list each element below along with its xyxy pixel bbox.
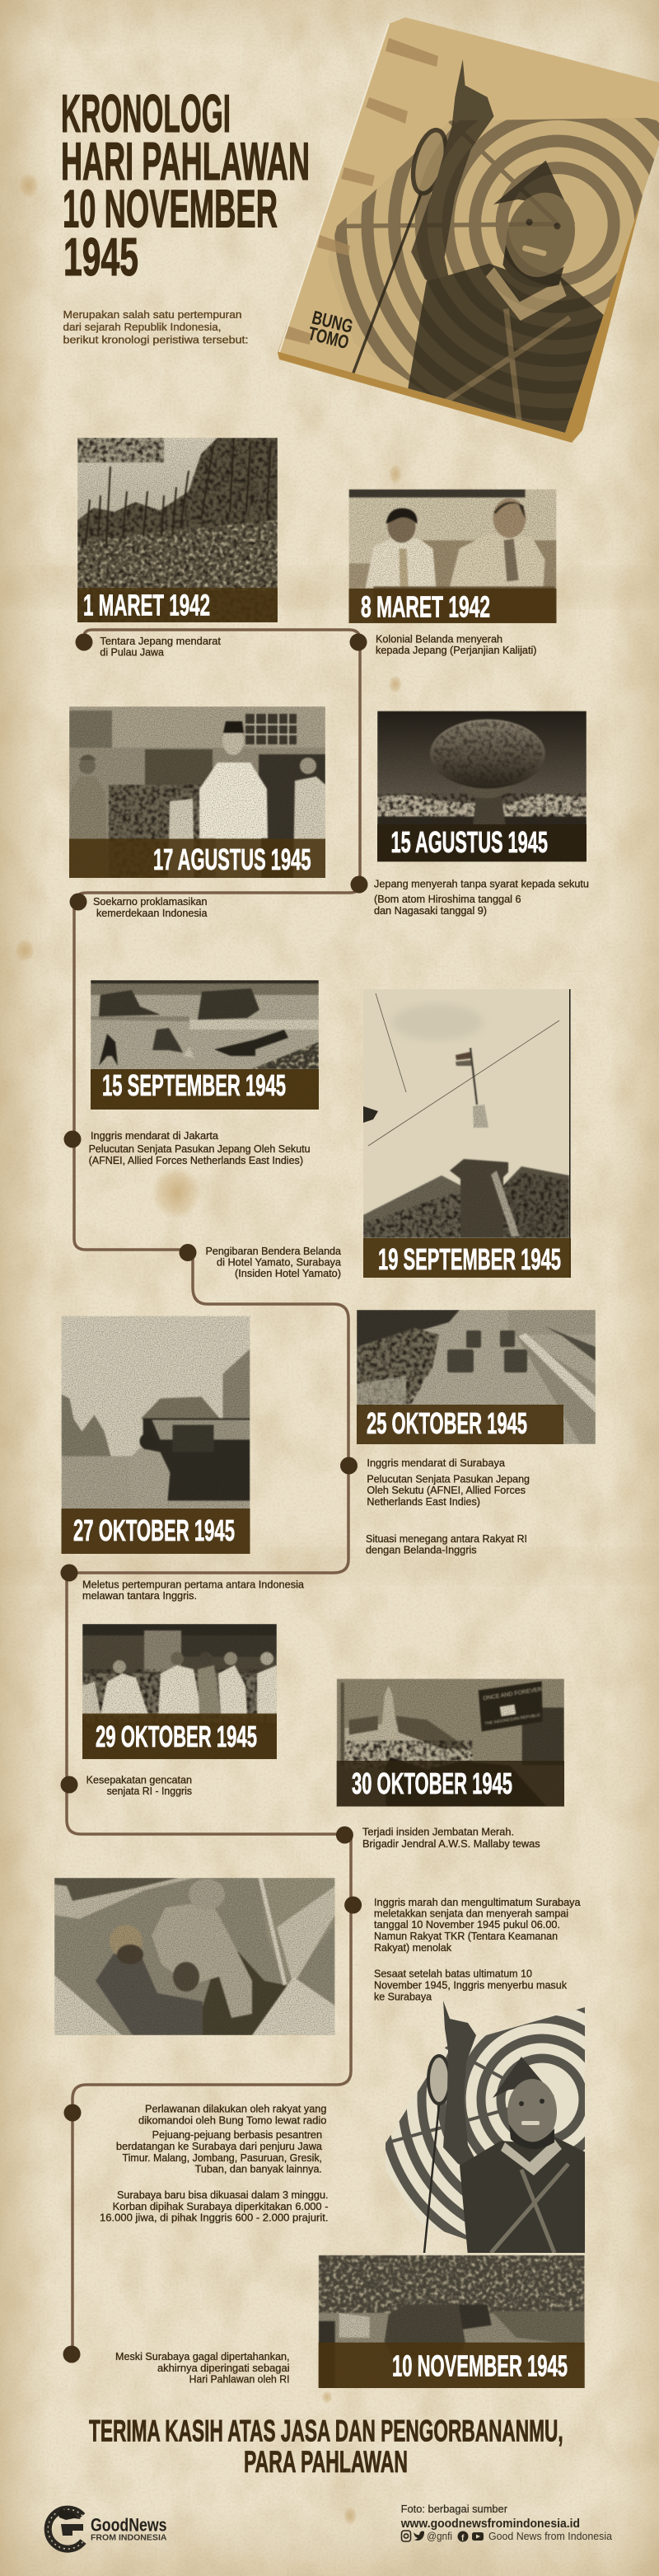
dot: 17 Agustus <box>69 894 87 910</box>
caption: 29 Oktober <box>86 1774 192 1797</box>
date label <box>363 1238 571 1278</box>
photo: soldier beside armored vehicle <box>61 1316 250 1553</box>
dot: 1 Maret <box>76 633 92 651</box>
caption: perlawanan <box>100 2104 328 2224</box>
dot: ultimatum <box>344 1896 362 1914</box>
caption: 25 Oktober: Oleh Sekutu (AFNEI, Allied Forces <box>367 1485 526 1496</box>
caption: 10 November: akhirnya diperingati sebagai <box>157 2363 290 2374</box>
date label: 8 MARET 1942 <box>361 590 490 623</box>
caption: 29 Oktober: senjata RI - Inggris <box>107 1785 192 1797</box>
caption: ultimatum: meletakkan senjata dan menyerah sampai <box>374 1908 568 1920</box>
panel: 19 September 1945 <box>363 989 571 1278</box>
caption: 25 Oktober: Pelucutan Senjata Pasukan Jepang <box>367 1474 530 1485</box>
photo: Bung Tomo speaking <box>386 2001 585 2253</box>
date label: 15 SEPTEMBER 1945 <box>102 1068 286 1102</box>
photo: Soekarno proclamation <box>69 706 325 878</box>
caption: perlawanan: Korban dipihak Surabaya diperkitakan 6.000 - <box>113 2201 328 2212</box>
caption: 19 September: Pengibaran Bendera Belanda <box>206 1246 341 1257</box>
caption: 1 Maret <box>100 636 222 658</box>
dot: 15 Agustus <box>351 875 367 894</box>
caption: perlawanan: Surabaya baru bisa dikuasai dalam 3 minggu. <box>117 2189 328 2201</box>
dot: 15 September <box>64 1131 81 1147</box>
caption: 19 September: (Insiden Hotel Yamato) <box>235 1268 341 1279</box>
caption: 1 Maret: Tentara Jepang mendarat <box>100 636 222 647</box>
caption: 15 Agustus <box>374 879 589 917</box>
panel: 30 Oktober 1945 <box>337 1678 564 1807</box>
caption: 17 Agustus: kemerdekaan Indonesia <box>96 908 208 919</box>
caption: perlawanan: Pejuang-pejuang berbasis pesantren <box>152 2129 322 2141</box>
caption: 17 Agustus <box>93 896 208 919</box>
caption: perlawanan: Timur. Malang, Jombang, Pasuruan, Gresik, <box>122 2152 322 2164</box>
icon: facebook: f <box>461 2534 465 2543</box>
book cover label: BUNG <box>310 307 355 337</box>
icon: facebook <box>458 2531 468 2543</box>
caption: 15 September: (AFNEI, Allied Forces Netherlands East Indies) <box>89 1155 303 1166</box>
dot: 10 November <box>63 2346 81 2363</box>
date label <box>377 824 587 861</box>
panel: 15 September 1945 <box>91 980 319 1110</box>
panel: 15 Agustus 1945 <box>377 711 587 862</box>
credits: Foto: berbagai sumber <box>401 2503 507 2515</box>
logo: GoodNews from Indonesia: GoodNews <box>91 2515 166 2536</box>
date label: 15 AGUSTUS 1945 <box>390 825 548 859</box>
logo: GoodNews from Indonesia: FROM INDONESIA <box>91 2533 167 2543</box>
caption: perlawanan: Tuban, dan banyak lainnya. <box>195 2164 322 2175</box>
credits: Good News from Indonesia <box>488 2530 613 2542</box>
caption: 17 Agustus: Soekarno proklamasikan <box>93 896 208 908</box>
book cover label: TOMO <box>306 322 351 353</box>
caption: 15 September: Inggris mendarat di Jakarta <box>91 1130 218 1142</box>
caption: perlawanan: dikomandoi oleh Bung Tomo lewat radio <box>138 2115 326 2127</box>
caption: ultimatum: tanggal 10 November 1945 pukul 06.00. <box>374 1919 560 1931</box>
photo: tanks under trees <box>318 2255 585 2388</box>
dot: 8 Maret <box>349 633 367 651</box>
date label <box>319 2343 585 2388</box>
caption: 10 November <box>115 2351 290 2386</box>
icon: instagram <box>402 2531 410 2541</box>
caption: ultimatum: Sesaat setelah batas ultimatum 10 <box>374 1968 532 1980</box>
closing heading: PARA PAHLAWAN <box>244 2445 408 2479</box>
dot: 27 Oktober <box>61 1565 77 1581</box>
date label: 17 AGUSTUS 1945 <box>153 842 311 876</box>
dot: 29 Oktober <box>61 1776 77 1794</box>
date label <box>61 1509 250 1554</box>
caption: ultimatum: ke Surabaya <box>374 1992 432 2003</box>
dot: perlawanan <box>64 2104 81 2122</box>
intro text: berikut kronologi peristiwa tersebut: <box>63 333 249 346</box>
photo: street with billboard and wrecked car: THE INDONESIAN REPUBLIC <box>484 1713 541 1726</box>
panel: 17 Agustus 1945 <box>69 706 325 878</box>
caption: ultimatum: Rakyat) menolak <box>374 1942 452 1954</box>
photo: flag on Hotel Yamato tower <box>363 989 571 1278</box>
date label <box>91 1068 319 1110</box>
caption: 8 Maret: kepada Jepang (Perjanjian Kalijati) <box>376 645 537 656</box>
caption: 25 Oktober: Situasi menegang antara Rakyat RI <box>366 1533 527 1545</box>
icon: youtube <box>472 2532 484 2541</box>
date label: 25 OKTOBER 1945 <box>367 1406 527 1440</box>
date label: 27 OKTOBER 1945 <box>73 1513 235 1547</box>
date label <box>69 839 325 878</box>
caption: 19 September <box>206 1246 341 1279</box>
title: KRONOLOGI <box>61 83 231 143</box>
caption: 8 Maret: Kolonial Belanda menyerah <box>376 633 502 645</box>
photo: atomic mushroom cloud <box>377 711 587 862</box>
logo: GoodNews from Indonesia <box>48 2508 167 2549</box>
credits: @gnfi <box>427 2530 452 2542</box>
dot: 25 Oktober <box>340 1457 358 1474</box>
caption: 25 Oktober: Inggris mendarat di Surabaya <box>367 1457 505 1469</box>
caption: perlawanan: Perlawanan dilakukan oleh rakyat yang <box>145 2104 326 2115</box>
photo: street with billboard and wrecked car <box>336 1678 564 1807</box>
caption: 30 Oktober <box>362 1827 540 1850</box>
credits: www.goodnewsfromindonesia.id <box>400 2517 580 2531</box>
caption: 15 Agustus: Jepang menyerah tanpa syarat kepada sekutu <box>374 879 589 890</box>
caption: 30 Oktober: Terjadi insiden Jembatan Merah. <box>362 1827 514 1838</box>
date label <box>82 1714 277 1759</box>
caption: 8 Maret <box>376 633 537 656</box>
date label: 30 OKTOBER 1945 <box>352 1767 512 1800</box>
photo: tanks on the boulevard <box>357 1310 596 1444</box>
timeline line <box>67 630 360 2354</box>
date label: 1 MARET 1942 <box>83 589 210 622</box>
caption: 10 November: Hari Pahlawan oleh RI <box>189 2374 290 2386</box>
closing heading <box>89 2414 563 2479</box>
caption: 27 Oktober: melawan tantara Inggris. <box>82 1590 197 1602</box>
title: 1945 <box>63 227 138 287</box>
caption: 25 Oktober: dengan Belanda-Inggris <box>366 1545 477 1556</box>
caption: 27 Oktober <box>82 1579 304 1602</box>
caption: ultimatum: Inggris marah dan mengultimatum Surabaya <box>374 1897 581 1908</box>
icon: garuda emblem <box>48 2508 83 2549</box>
caption: 30 Oktober: Brigadir Jendral A.W.S. Mallaby tewas <box>362 1838 540 1850</box>
panel: 27 Oktober 1945 <box>61 1316 250 1554</box>
panel: 25 Oktober 1945 <box>357 1310 596 1444</box>
panel: 10 November 1945 <box>319 2255 585 2389</box>
caption: 29 Oktober: Kesepakatan gencatan <box>86 1774 192 1785</box>
title: 10 NOVEMBER <box>63 178 278 239</box>
intro text <box>63 308 249 346</box>
credits <box>400 2503 613 2543</box>
caption: ultimatum <box>374 1897 581 2003</box>
caption: perlawanan: berdatangan ke Surabaya dari penjuru Jawa <box>116 2141 322 2152</box>
photo: Japanese soldiers with raised rifles <box>77 438 278 622</box>
caption: 19 September: di Hotel Yamato, Surabaya <box>217 1257 341 1269</box>
caption: ultimatum: November 1945, Inggris menyerbu masuk <box>374 1980 568 1992</box>
caption: ultimatum: Namun Rakyat TKR (Tentara Keamanan <box>374 1931 558 1942</box>
caption: 10 November: Meski Surabaya gagal dipertahankan, <box>115 2351 290 2363</box>
dot: 19 September <box>180 1244 196 1261</box>
caption: perlawanan: 16.000 jiwa, di pihak Inggris 600 - 2.000 prajurit. <box>100 2212 328 2224</box>
dot: 30 Oktober <box>336 1827 353 1843</box>
panel: 1 Maret 1942 <box>77 438 278 622</box>
icon: twitter <box>414 2531 424 2541</box>
photo: street with billboard and wrecked car: ONCE AND FOREVER <box>483 1687 542 1701</box>
caption: 15 September: Pelucutan Senjata Pasukan Jepang Oleh Sekutu <box>89 1143 311 1155</box>
date label: 29 OKTOBER 1945 <box>96 1720 257 1753</box>
date label <box>357 1405 563 1444</box>
photo: ceasefire meeting <box>82 1624 277 1759</box>
date label <box>337 1761 564 1807</box>
photo: signing of Kalijati agreement <box>349 490 557 623</box>
caption: 25 Oktober <box>366 1457 530 1556</box>
book cover label <box>306 307 355 353</box>
panel: 8 Maret 1942 <box>349 490 557 623</box>
caption: 15 September <box>89 1130 311 1166</box>
photo: soldiers with field radio in trench <box>54 1878 335 2035</box>
caption: 15 Agustus: dan Nagasaki tanggal 9) <box>374 905 487 917</box>
book cover: Bung Tomo <box>278 17 659 443</box>
caption: 25 Oktober: Netherlands East Indies) <box>367 1496 480 1508</box>
panel: 29 Oktober 1945 <box>82 1624 277 1759</box>
intro text: dari sejarah Republik Indonesia, <box>63 321 221 333</box>
caption: 15 Agustus: (Bom atom Hiroshima tanggal 6 <box>374 894 521 905</box>
caption: 27 Oktober: Meletus pertempuran pertama antara Indonesia <box>82 1579 304 1591</box>
title: HARI PAHLAWAN <box>61 131 310 191</box>
title <box>61 83 310 287</box>
caption: 1 Maret: di Pulau Jawa <box>100 646 164 658</box>
photo: troops landing with artillery <box>91 980 319 1069</box>
intro text: Merupakan salah satu pertempuran <box>63 308 242 321</box>
